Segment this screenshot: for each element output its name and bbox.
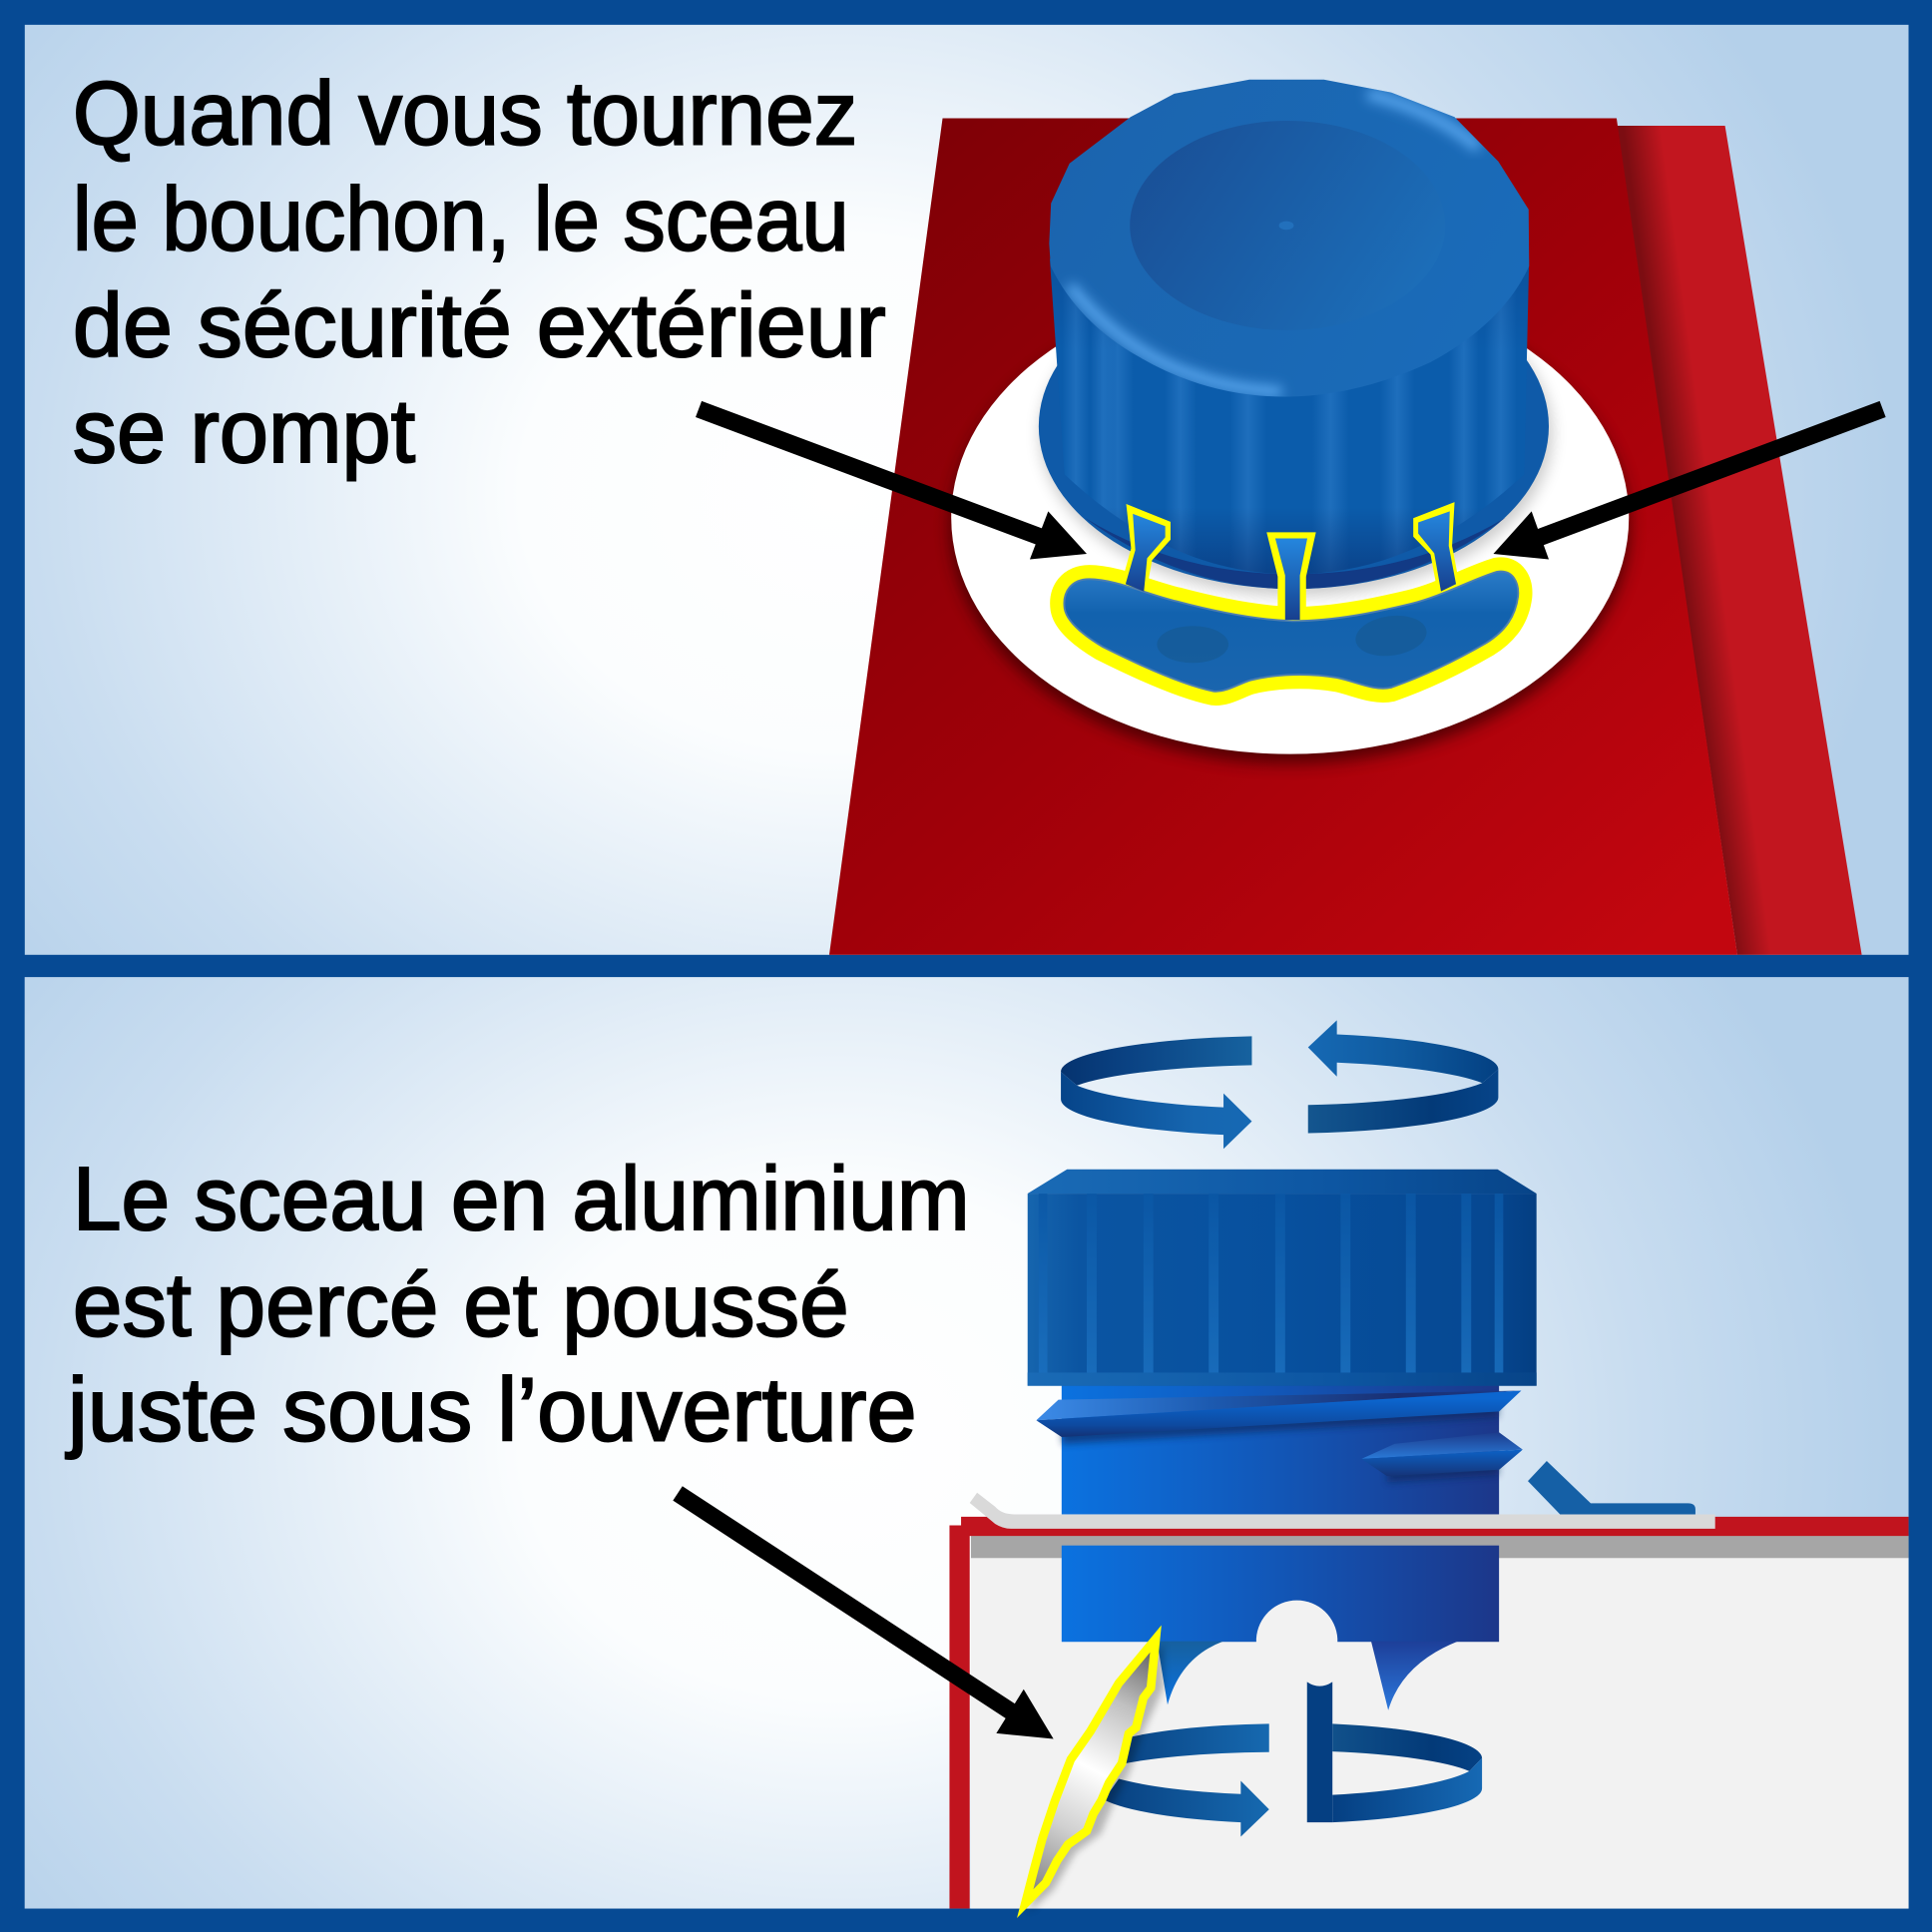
neck thread shadows <box>1062 1397 1498 1482</box>
heading text: top: le bouchon, le sceau <box>73 170 849 270</box>
cap lid <box>1049 80 1529 397</box>
blue torn band piece <box>1528 1461 1695 1517</box>
screw thread: long <box>1036 1390 1521 1437</box>
cap side <box>1028 1194 1537 1386</box>
foil shard highlighted in yellow <box>1025 1639 1165 1912</box>
cap body with ribs <box>1041 252 1534 579</box>
blue band <box>1064 572 1518 692</box>
panel: cap seal breaking <box>25 25 1909 955</box>
heading text: top: se rompt <box>73 381 415 482</box>
rotation arrow: above cap left <box>1061 1036 1251 1149</box>
back left band <box>1109 1723 1269 1767</box>
rotation arrow: above cap right <box>1308 1020 1498 1134</box>
side face of red carton <box>1617 126 1862 955</box>
heading text: bottom <box>65 1149 970 1460</box>
lid centre dot <box>1279 222 1293 230</box>
central post <box>1307 1682 1332 1822</box>
blue tabs <box>1126 511 1456 620</box>
tamper band with yellow outline <box>1064 502 1518 692</box>
panel background <box>25 25 1909 955</box>
red carton outline <box>949 1517 1909 1909</box>
heading text: bottom: Le sceau en aluminium <box>73 1149 970 1249</box>
screw thread: short <box>1361 1432 1523 1476</box>
arrow: bottom black arrow <box>678 1493 1054 1739</box>
cap chamfer <box>1028 1170 1537 1194</box>
arrow: left black arrow <box>699 409 1087 560</box>
side view cap <box>1028 1170 1537 1386</box>
rotation arrow: inside carton <box>1104 1682 1482 1837</box>
heading text: bottom: est percé et poussé <box>73 1254 849 1355</box>
heading text: bottom: juste sous l’ouverture <box>65 1359 917 1460</box>
cap ribs <box>1039 1194 1503 1373</box>
grey carton layer <box>971 1535 1909 1558</box>
upper neck <box>1062 1380 1499 1514</box>
heading text: top: Quand vous tournez <box>73 63 857 164</box>
brim inner rim <box>1085 518 1506 589</box>
panel: aluminium seal pierced <box>25 977 1909 1912</box>
aluminium foil seal <box>970 1493 1715 1529</box>
disc shadow <box>950 290 1631 764</box>
heading text: top: de sécurité extérieur <box>73 275 886 376</box>
yellow outline of band <box>1064 572 1518 692</box>
band dimples <box>1157 626 1228 663</box>
heading text: top <box>73 63 886 482</box>
front left band with head <box>1104 1779 1269 1837</box>
right cutting tooth <box>1371 1642 1458 1710</box>
white disc <box>951 347 1629 754</box>
notch in neck <box>1256 1601 1337 1643</box>
red carton top <box>829 119 1737 955</box>
left cutting tooth <box>1157 1642 1223 1704</box>
back right band <box>1332 1723 1482 1771</box>
carton interior <box>971 1558 1909 1909</box>
lid recessed circle <box>1130 121 1387 327</box>
arrow: right black arrow <box>1493 409 1883 560</box>
blue bottle cap <box>1039 80 1553 597</box>
cap shadow <box>1034 353 1559 603</box>
front right band <box>1332 1758 1482 1822</box>
lower neck <box>1062 1546 1499 1710</box>
yellow outline of tabs <box>1122 502 1459 616</box>
cap bottom lip <box>1028 1372 1537 1386</box>
panel background <box>25 977 1909 1909</box>
cap brim <box>1038 359 1549 589</box>
lid highlights <box>1070 94 1479 392</box>
